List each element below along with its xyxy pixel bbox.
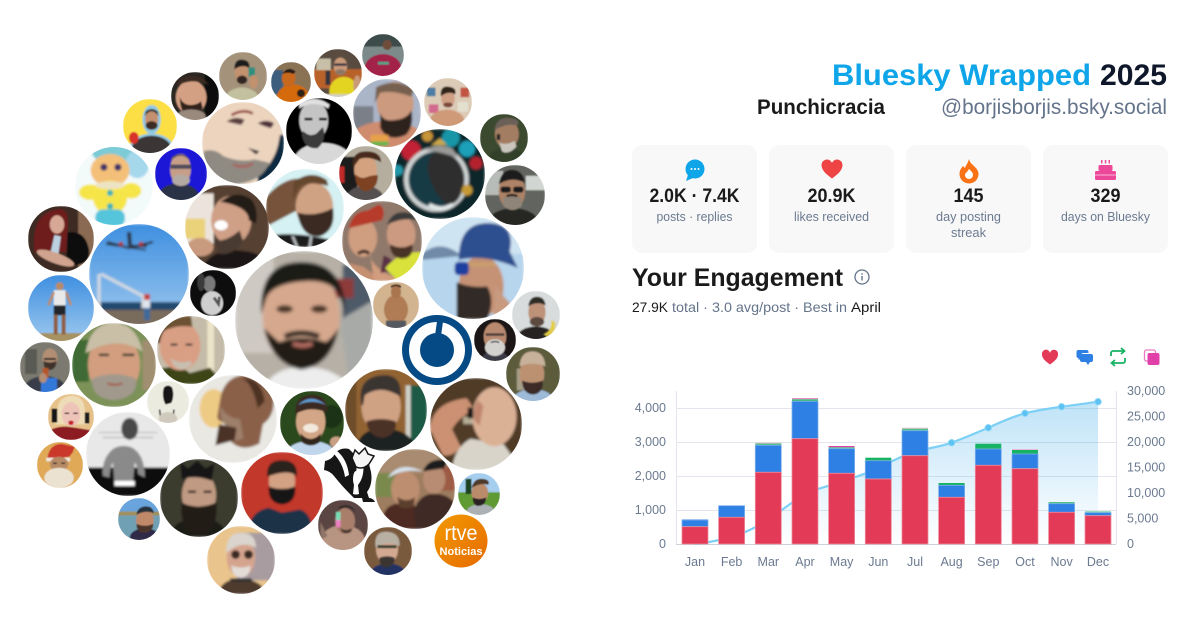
bar: Nov [1049,502,1075,544]
bar: Jun [865,458,891,544]
bar: Oct [1012,449,1038,544]
avatar: grey hair round glasses [207,526,275,594]
bar: Jan [682,519,708,544]
stacked bars [682,398,1111,544]
title: Bluesky Wrapped [832,59,1091,92]
left axis labels [635,401,666,551]
avatar: sunglasses in car [485,165,545,225]
avatar: laughing cap man [280,391,344,455]
avatar: green park [458,473,500,515]
stat label: likes received [794,210,869,224]
avatar: man under blue sky [28,275,94,342]
icon: chat bubble [686,160,704,181]
icon: birthday cake [1095,160,1116,180]
stat value: 20.9K [808,186,856,207]
stat label: days on Bluesky [1061,210,1151,224]
month labels: Apr [795,555,815,569]
avatar: long hair beard [266,169,346,247]
display name: Punchicracia [757,96,885,119]
month labels: Jul [907,555,923,569]
left axis labels: 1,000 [635,503,666,517]
engagement summary [632,299,881,315]
right axis labels: 30,000 [1127,384,1165,398]
avatar: yellow background man [123,99,177,153]
cumulative line [695,402,1098,544]
right axis labels: 20,000 [1127,435,1165,449]
stat value: 329 [1090,186,1120,207]
avatar: lake selfie [118,498,160,547]
right axis labels: 10,000 [1127,486,1165,500]
avatar: blue bucket hat [422,217,524,319]
engagement summary: 27.9K [632,299,669,315]
avatar: selfie shirtless small [373,282,419,329]
panel: stat days on Bluesky [1043,145,1168,253]
stat value: 145 [954,186,984,207]
title year: 2025 [1100,59,1167,92]
month labels: Dec [1087,555,1109,569]
avatar: grey hair glasses navy shirt [364,527,412,575]
icon: blue circle logo [402,315,472,385]
avatar: drag queen [48,394,94,440]
avatar: black and white muscular man [86,412,170,496]
avatar: black and white masked figure [147,381,189,426]
panel: avatar bubble cluster [20,34,560,594]
avatar: shirtless bearded man [353,79,421,147]
right axis labels [1127,384,1165,551]
avatar: brown beard car [339,146,393,200]
month labels [685,555,1109,569]
panel: title header [757,59,1167,119]
left axis labels: 0 [659,537,666,551]
avatar: crown beard [160,459,238,537]
panel: stat posting streak [906,145,1031,253]
month labels: Feb [721,555,742,569]
bar: May [829,446,855,544]
avatar: toy doll [75,144,153,227]
chart legend icons [1042,348,1160,366]
avatar: two men selfie caps [342,201,422,281]
stat value: 2.0K · 7.4K [650,186,740,207]
avatar: green shirt blond [157,316,225,384]
avatar: mirror selfie [219,52,267,100]
month labels: Jun [868,555,888,569]
avatar: beige cap [506,347,560,401]
avatar: painted portrait [189,375,277,463]
avatar: rainbow light [318,500,368,550]
icon: quote [1144,350,1160,365]
icon: like [1042,350,1058,364]
month labels: Oct [1015,555,1035,569]
engagement summary: April [851,299,881,315]
avatar: yellow shirt [314,49,362,97]
stat label line two: streak [951,226,987,240]
combo chart: monthly engagement [635,384,1165,569]
avatar: stickers wall [424,78,472,126]
icon: info [855,270,869,284]
month labels: May [830,555,854,569]
left axis labels: 2,000 [635,469,666,483]
bar: Apr [792,398,818,544]
avatar: central smiling man [235,251,373,389]
y grid and axes [676,391,1116,544]
cumulative points [948,398,1101,446]
month labels: Sep [977,555,999,569]
avatar: dark sweater man [345,369,427,451]
icon: rtve Noticias logo: Noticias [440,546,482,558]
right axis labels: 25,000 [1127,410,1165,424]
left axis labels: 3,000 [635,435,666,449]
icon: flame [960,159,978,184]
avatar: christmas bauble [392,129,485,219]
icon: heart [821,159,842,178]
stat label: posts · replies [656,210,732,224]
bar: Dec [1085,511,1111,544]
engagement summary: total · 3.0 avg/post · Best in [672,299,847,315]
icon: skunk cartoon [324,448,375,502]
avatar: black and white shirtless [286,98,352,164]
avatar: selfie phone [20,342,70,392]
month labels: Aug [940,555,963,569]
right axis labels: 5,000 [1127,512,1158,526]
avatar: plane over beach [89,224,189,326]
avatar: blue background glasses [155,148,207,200]
icon: rtve Noticias logo [434,514,488,568]
bar: Aug [939,483,965,544]
cumulative area [695,402,1098,544]
avatar: white shirt arm behind head [430,378,522,470]
right axis labels: 0 [1127,537,1134,551]
left axis labels: 4,000 [635,401,666,415]
avatar: side grey beard [480,114,528,162]
stat label: day posting [936,210,1001,224]
month labels: Jan [685,555,705,569]
icon: reply [1076,350,1093,365]
avatar: black and white nude statue [190,270,236,316]
avatar: grey beard closeup [202,102,284,184]
avatar: santa [37,442,83,488]
avatar: white beard glasses [474,319,516,361]
avatar: red wall man [241,452,323,534]
right axis labels: 15,000 [1127,460,1165,474]
bar: Sep [975,444,1001,544]
panel: stat likes received [769,145,894,253]
icon: repost [1111,348,1125,366]
bar: Feb [719,506,745,544]
heading: your engagement: Your Engagement [632,264,844,292]
month labels: Mar [758,555,779,569]
bar: Jul [902,428,928,544]
icon: rtve Noticias logo: rtve [444,522,478,545]
handle: @borjisborjis.bsky.social [941,96,1167,119]
avatar: banana man [512,291,560,339]
avatar: beige cap grey beard [72,323,156,407]
avatar: bearded man tongue out [171,72,219,123]
avatar: red jacket [362,34,404,76]
avatar: red hair [28,206,94,272]
bar: Mar [755,443,781,544]
avatar: two men forest hoodies [375,449,458,529]
month labels: Nov [1050,555,1073,569]
avatar: orange shirt [271,62,311,102]
panel: stat posts and replies [632,145,757,253]
avatar: laughing man [185,185,269,269]
